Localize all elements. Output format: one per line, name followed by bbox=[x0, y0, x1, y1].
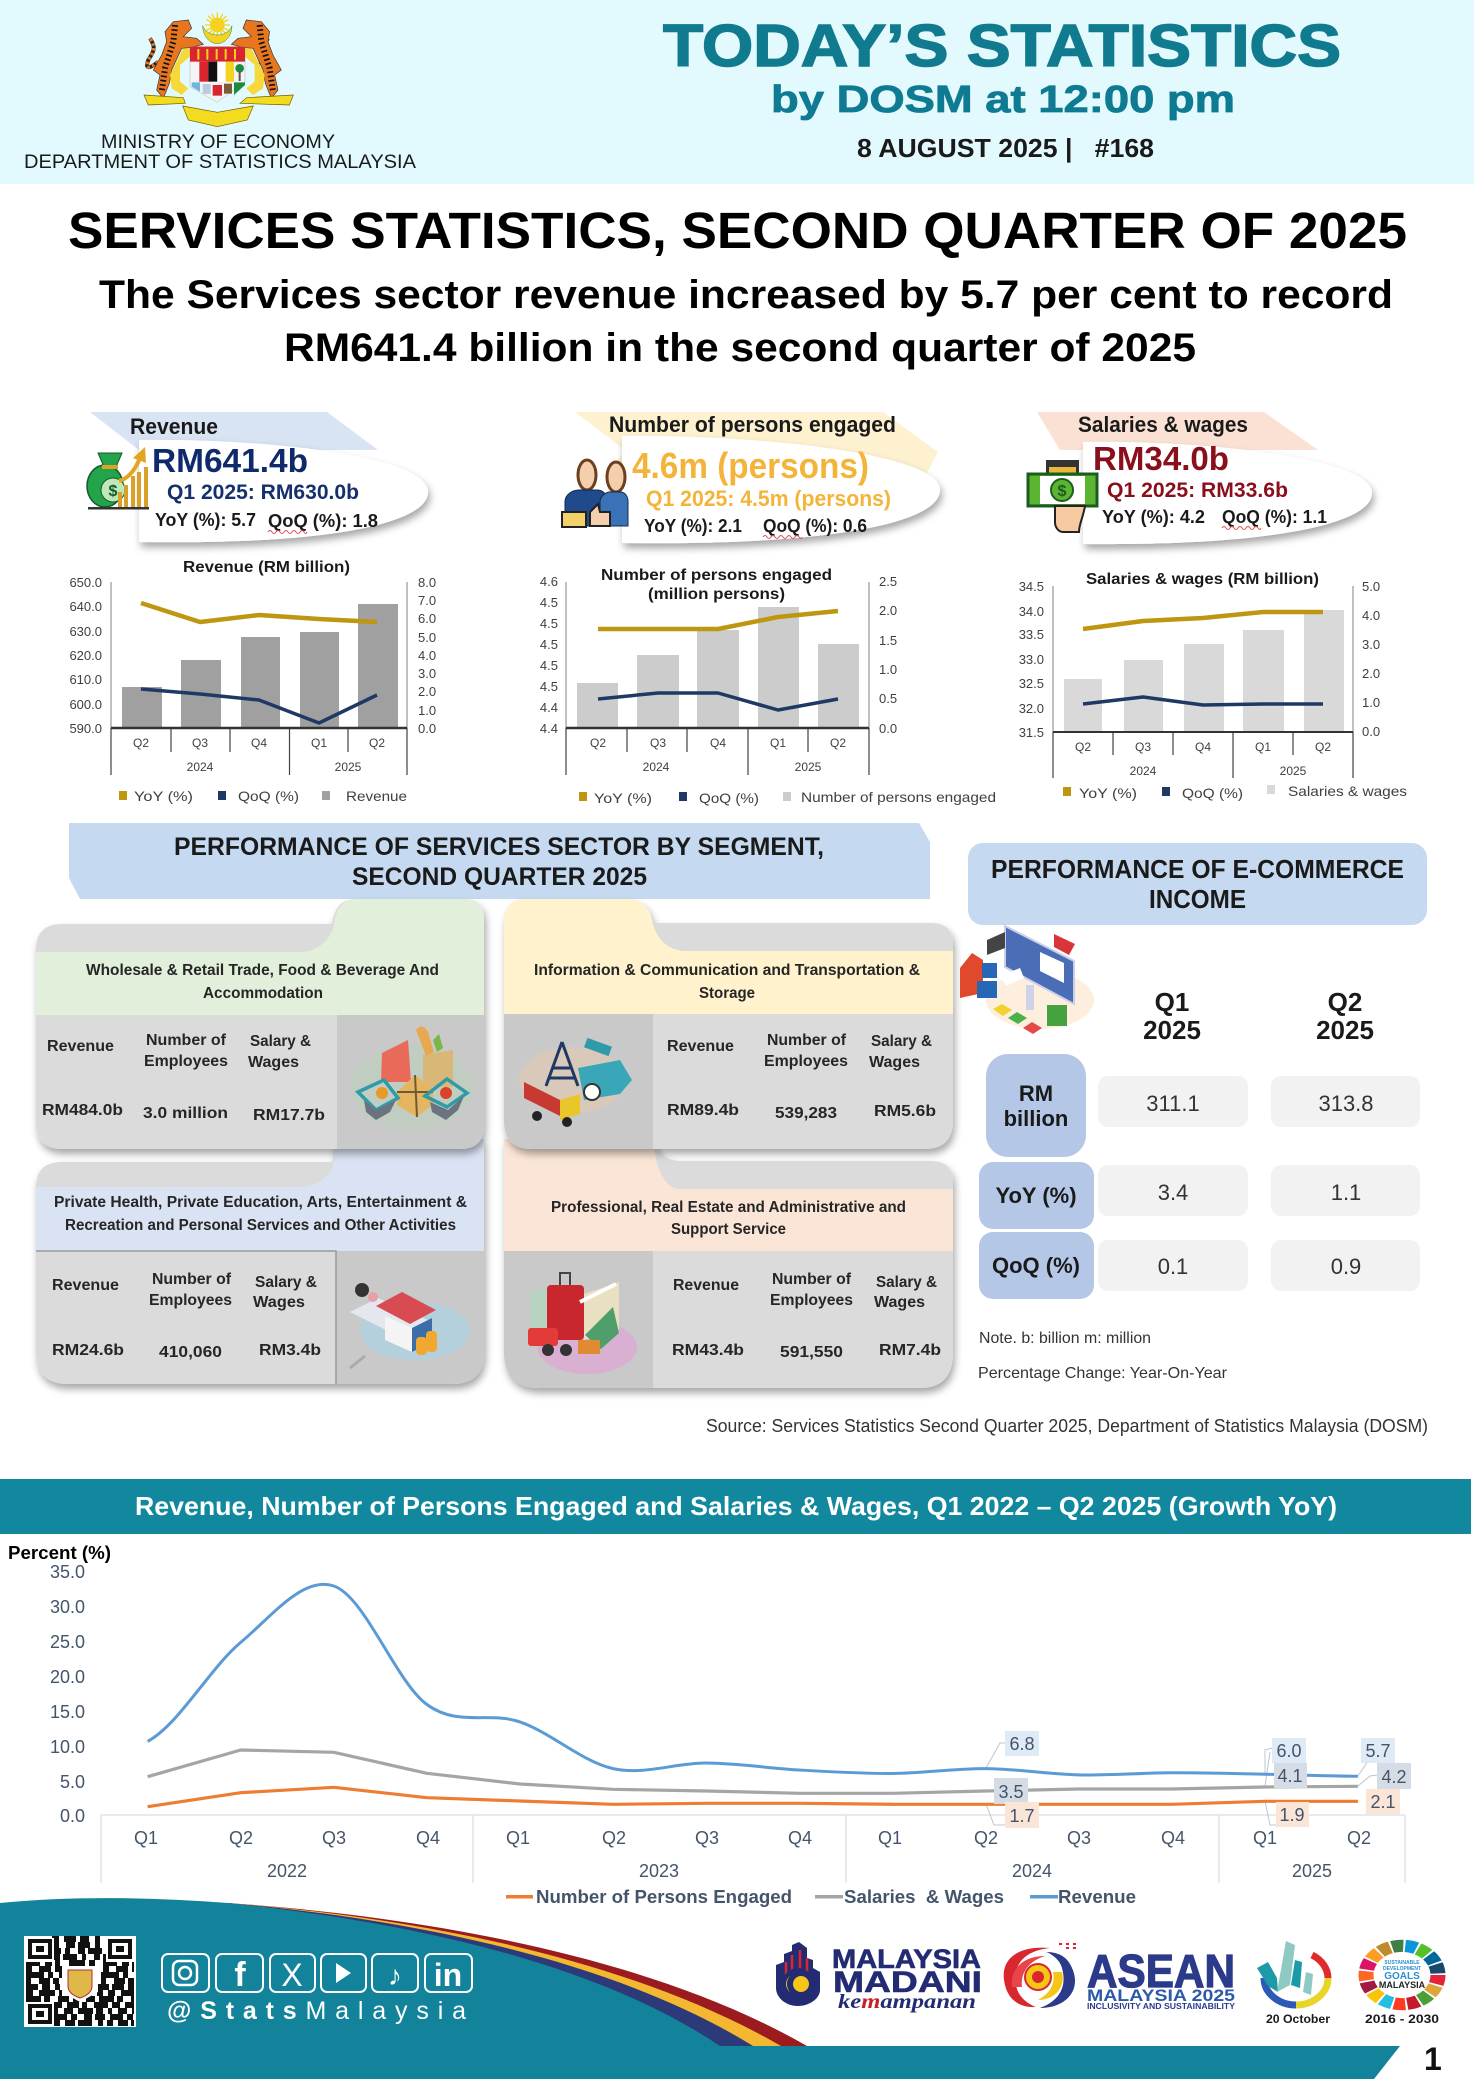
line chart: growth YoY: Q3 bbox=[1067, 1828, 1091, 1848]
panel: wholesale and retail segment: Wages bbox=[248, 1054, 299, 1071]
panel: information and transport segment: Number of bbox=[767, 1032, 847, 1049]
panel: revenue KPI bbox=[87, 412, 428, 542]
panel: revenue KPI: RM641.4b bbox=[152, 442, 308, 479]
line chart: growth YoY: Q1 bbox=[878, 1828, 902, 1848]
line chart: growth YoY: Q4 bbox=[1161, 1828, 1185, 1848]
panel: persons engaged KPI: YoY (%): 2.1 bbox=[644, 516, 742, 536]
chart: revenue: 7.0 bbox=[418, 593, 436, 608]
panel: salaries KPI: RM34.0b bbox=[1093, 440, 1229, 477]
column headings: 2025 bbox=[1143, 1015, 1201, 1045]
main title: The Services sector revenue increased by 5.7 per cent to record bbox=[99, 273, 1393, 317]
panel: revenue KPI: Q1 2025: RM630.0b bbox=[167, 481, 359, 504]
panel: information and transport segment: Revenue bbox=[667, 1038, 734, 1055]
icon: shopping baskets bbox=[350, 1026, 474, 1130]
chart: revenue: 600.0 bbox=[69, 697, 102, 712]
chart legend: Salaries & Wages bbox=[844, 1887, 1004, 1907]
chart: revenue: 3.0 bbox=[418, 666, 436, 681]
chart: persons engaged: 4.5 bbox=[540, 616, 558, 631]
panel: private health and education segment: Number of bbox=[152, 1271, 232, 1288]
chart: salaries and wages: 32.5 bbox=[1019, 676, 1044, 691]
chart: salaries and wages: 0.0 bbox=[1362, 724, 1380, 739]
row: YoY: 3.4 bbox=[1158, 1180, 1188, 1205]
line chart: growth YoY bbox=[8, 1543, 1411, 1907]
panel: wholesale and retail segment: Wholesale & Retail Trade, Food & Beverage And bbox=[86, 962, 439, 979]
panel: professional and real estate segment: RM7.4b bbox=[879, 1342, 941, 1359]
line chart: growth YoY: 25.0 bbox=[50, 1632, 85, 1652]
icon: banknote and hand: $ bbox=[1058, 483, 1067, 500]
chart: persons engaged: 2.5 bbox=[879, 574, 897, 589]
row: RM billion: 311.1 bbox=[1146, 1091, 1200, 1116]
chart: revenue: 2024 bbox=[187, 760, 214, 774]
chart: revenue: Q4 bbox=[251, 736, 267, 750]
logo: Sustainable Development Goals wheel bbox=[1365, 1946, 1439, 2026]
row: RM billion: billion bbox=[1004, 1106, 1068, 1131]
chart: salaries and wages: Salaries & wages (RM billion) bbox=[1086, 571, 1319, 588]
logo: Sustainable Development Goals wheel: MALAYSIA bbox=[1379, 1980, 1426, 1990]
chart: persons engaged: YoY (%) bbox=[594, 790, 652, 806]
panel: persons engaged KPI: Q1 2025: 4.5m (persons) bbox=[646, 486, 891, 511]
chart: persons engaged: Q2 bbox=[590, 736, 606, 750]
data labels: 6.0 bbox=[1276, 1741, 1302, 1761]
line chart: growth YoY: Q4 bbox=[788, 1828, 812, 1848]
chart: persons engaged: 2.0 bbox=[879, 603, 897, 618]
panel: private health and education segment: RM24.6b bbox=[52, 1342, 124, 1359]
panel: professional and real estate segment: 591,550 bbox=[780, 1344, 843, 1361]
chart: revenue: 620.0 bbox=[69, 648, 102, 663]
chart: revenue: QoQ (%) bbox=[238, 788, 299, 804]
heading: e-commerce bbox=[968, 843, 1427, 925]
line chart: growth YoY: Q3 bbox=[695, 1828, 719, 1848]
panel: salaries KPI: YoY (%): 4.2 bbox=[1102, 507, 1205, 527]
logo: ASEAN Malaysia 2025: ASEAN bbox=[1087, 1945, 1235, 1997]
panel: information and transport segment: RM5.6b bbox=[874, 1103, 936, 1120]
panel: persons engaged KPI: 4.6m (persons) bbox=[632, 445, 869, 486]
footer band bbox=[0, 1898, 1442, 2079]
data labels: 5.7 bbox=[1365, 1741, 1391, 1761]
row: QoQ: 0.9 bbox=[1331, 1254, 1361, 1279]
logo: Malaysia Madani bbox=[776, 1942, 982, 2013]
chart: salaries and wages: 33.5 bbox=[1019, 627, 1044, 642]
chart: revenue: 1.0 bbox=[418, 703, 436, 718]
chart: revenue: Revenue (RM billion) bbox=[183, 559, 350, 576]
main title: RM641.4 billion in the second quarter of 2025 bbox=[284, 326, 1196, 370]
line chart: growth YoY: 5.0 bbox=[60, 1772, 85, 1792]
panel: private health and education segment: RM3.4b bbox=[259, 1342, 321, 1359]
row: YoY: 1.1 bbox=[1331, 1180, 1361, 1205]
line chart: growth YoY: 2023 bbox=[639, 1861, 679, 1881]
logo: Malaysia Madani: MADANI bbox=[833, 1966, 982, 1999]
panel: information and transport segment bbox=[504, 899, 953, 1149]
chart: revenue: 2025 bbox=[335, 760, 362, 774]
logo: ASEAN Malaysia 2025: MALAYSIA 2025 bbox=[1087, 1986, 1235, 2005]
panel: salaries KPI bbox=[1028, 412, 1372, 544]
row: QoQ bbox=[979, 1232, 1420, 1299]
icon: buildings and coins bbox=[350, 1283, 470, 1368]
notes: Note. b: billion m: million bbox=[979, 1330, 1151, 1347]
social media icons: in bbox=[434, 1957, 462, 1993]
chart: salaries and wages: 32.0 bbox=[1019, 701, 1044, 716]
notes bbox=[978, 1330, 1228, 1382]
panel: professional and real estate segment: Support Service bbox=[671, 1221, 786, 1238]
panel: wholesale and retail segment bbox=[36, 899, 484, 1149]
chart: salaries and wages: QoQ (%) bbox=[1182, 785, 1243, 801]
line chart: growth YoY: 15.0 bbox=[50, 1702, 85, 1722]
header band bbox=[0, 0, 1474, 184]
logo: World Statistics Day: 20 October bbox=[1266, 2012, 1330, 2026]
logo: Malaysia Madani: kemampanan bbox=[838, 1991, 976, 2013]
panel: wholesale and retail segment: Employees bbox=[144, 1053, 228, 1070]
column headings: Q2 bbox=[1328, 987, 1362, 1017]
text: ministry: DEPARTMENT OF STATISTICS MALAYSIA bbox=[24, 152, 416, 173]
panel: information and transport segment: Salary & bbox=[871, 1033, 932, 1050]
chart: persons engaged: 4.4 bbox=[540, 700, 558, 715]
text: ministry: MINISTRY OF ECONOMY bbox=[101, 132, 335, 153]
chart: salaries and wages: 4.0 bbox=[1362, 608, 1380, 623]
line chart: growth YoY: Q2 bbox=[602, 1828, 626, 1848]
panel: persons engaged KPI: Number of persons engaged bbox=[609, 412, 896, 437]
panel: professional and real estate segment: Revenue bbox=[673, 1277, 739, 1294]
social media icons: X bbox=[281, 1957, 303, 1993]
panel: professional and real estate segment bbox=[504, 1139, 953, 1388]
line chart: growth YoY: 2025 bbox=[1292, 1861, 1332, 1881]
chart: salaries and wages: 2025 bbox=[1280, 764, 1307, 778]
chart: revenue: YoY (%) bbox=[134, 788, 193, 804]
line chart: growth YoY: Q1 bbox=[1253, 1828, 1277, 1848]
header title bbox=[663, 13, 1341, 163]
chart: revenue: 2.0 bbox=[418, 684, 436, 699]
icon: logistics and telecom bbox=[519, 1038, 632, 1127]
chart: persons engaged: 4.5 bbox=[540, 658, 558, 673]
main title bbox=[68, 202, 1407, 370]
chart: revenue bbox=[69, 559, 436, 804]
chart: salaries and wages: Q4 bbox=[1195, 740, 1211, 754]
panel: private health and education segment: Salary & bbox=[255, 1274, 317, 1291]
page number: 1 bbox=[1424, 2041, 1442, 2077]
line chart: growth YoY: 35.0 bbox=[50, 1562, 85, 1582]
chart: persons engaged: 2024 bbox=[643, 760, 670, 774]
panel: wholesale and retail segment: Accommodation bbox=[203, 985, 323, 1002]
row: RM billion: 313.8 bbox=[1318, 1091, 1374, 1116]
chart: persons engaged: Q4 bbox=[710, 736, 726, 750]
data labels: 1.7 bbox=[1009, 1806, 1035, 1826]
panel: information and transport segment: RM89.4b bbox=[667, 1102, 739, 1119]
panel: revenue KPI: Revenue bbox=[130, 414, 218, 439]
panel: salaries KPI: Salaries & wages bbox=[1078, 412, 1248, 437]
icon: banknote and hand bbox=[1028, 460, 1097, 532]
social media icons: ♪ bbox=[388, 1960, 402, 1991]
line chart: growth YoY: Q2 bbox=[974, 1828, 998, 1848]
chart: salaries and wages: 34.0 bbox=[1019, 604, 1044, 619]
icon: money bag bbox=[87, 447, 149, 510]
panel: wholesale and retail segment: Number of bbox=[146, 1032, 227, 1049]
chart: salaries and wages: 2.0 bbox=[1362, 666, 1380, 681]
text: ministry bbox=[24, 132, 416, 173]
chart: salaries and wages: 1.0 bbox=[1362, 695, 1380, 710]
chart: revenue: Q2 bbox=[133, 736, 149, 750]
chart: persons engaged: Q1 bbox=[770, 736, 786, 750]
panel: wholesale and retail segment: RM17.7b bbox=[253, 1107, 325, 1124]
data labels bbox=[994, 1731, 1411, 1828]
icon: suitcase and map bbox=[528, 1273, 637, 1374]
data labels: 6.8 bbox=[1009, 1734, 1035, 1754]
line chart: growth YoY: Q1 bbox=[134, 1828, 158, 1848]
data labels: 3.5 bbox=[998, 1782, 1024, 1802]
line chart: growth YoY: Q2 bbox=[229, 1828, 253, 1848]
chart: revenue: Q3 bbox=[192, 736, 208, 750]
social media icons: @Stats Malaysia bbox=[167, 1997, 466, 2025]
chart legend: Number of Persons Engaged bbox=[536, 1887, 792, 1907]
line chart: growth YoY: Q2 bbox=[1347, 1828, 1371, 1848]
chart legend: Revenue bbox=[1058, 1887, 1136, 1907]
panel: professional and real estate segment: Number of bbox=[772, 1271, 852, 1288]
logo: ASEAN Malaysia 2025: INCLUSIVITY AND SUSTAINABILITY bbox=[1087, 2002, 1236, 2011]
panel: private health and education segment: Revenue bbox=[52, 1277, 119, 1294]
main title: SERVICES STATISTICS, SECOND QUARTER OF 2025 bbox=[68, 202, 1407, 259]
line chart: growth YoY: 0.0 bbox=[60, 1806, 85, 1826]
chart: salaries and wages: Q2 bbox=[1075, 740, 1091, 754]
chart: salaries and wages: Q2 bbox=[1315, 740, 1331, 754]
chart: salaries and wages: 5.0 bbox=[1362, 579, 1380, 594]
icon: money bag: $ bbox=[109, 483, 118, 500]
chart: revenue: 640.0 bbox=[69, 599, 102, 614]
row: YoY: YoY (%) bbox=[995, 1183, 1077, 1208]
chart: persons engaged: 4.4 bbox=[540, 721, 558, 736]
panel: revenue KPI: YoY (%): 5.7 bbox=[155, 510, 256, 530]
QR code bbox=[24, 1936, 136, 2027]
data labels: 4.1 bbox=[1277, 1766, 1303, 1786]
chart: revenue: Q2 bbox=[369, 736, 385, 750]
chart: revenue: 590.0 bbox=[69, 721, 102, 736]
row: RM billion: RM bbox=[1019, 1081, 1053, 1106]
panel: revenue KPI: QoQ (%): 1.8 bbox=[268, 511, 378, 531]
line chart: growth YoY: 20.0 bbox=[50, 1667, 85, 1687]
data labels: 1.9 bbox=[1279, 1805, 1305, 1825]
panel: private health and education segment: Employees bbox=[149, 1292, 232, 1309]
panel: private health and education segment: Wages bbox=[253, 1294, 305, 1311]
panel: information and transport segment: 539,283 bbox=[775, 1105, 837, 1122]
panel: information and transport segment: Information & Communication and Transportation & bbox=[534, 962, 920, 979]
segment heading banner: PERFORMANCE OF SERVICES SECTOR BY SEGMENT, bbox=[174, 833, 824, 861]
line chart: growth YoY: Q4 bbox=[416, 1828, 440, 1848]
column headings: 2025 bbox=[1316, 1015, 1374, 1045]
chart: revenue: 8.0 bbox=[418, 575, 436, 590]
panel: persons engaged KPI: QoQ (%): 0.6 bbox=[763, 516, 867, 536]
chart: salaries and wages: 3.0 bbox=[1362, 637, 1380, 652]
line chart: growth YoY: 2022 bbox=[267, 1861, 307, 1881]
chart: salaries and wages: Q3 bbox=[1135, 740, 1151, 754]
chart: persons engaged: QoQ (%) bbox=[699, 790, 759, 806]
chart: persons engaged: Number of persons engaged bbox=[601, 567, 832, 584]
header title: 8 AUGUST 2025 | #168 bbox=[857, 133, 1154, 163]
chart: salaries and wages: Salaries & wages bbox=[1288, 783, 1407, 799]
panel: wholesale and retail segment: Revenue bbox=[47, 1038, 114, 1055]
chart: salaries and wages: 31.5 bbox=[1019, 725, 1044, 740]
panel: information and transport segment: Employees bbox=[764, 1053, 848, 1070]
row: YoY bbox=[979, 1162, 1420, 1229]
line chart: growth YoY: 2024 bbox=[1012, 1861, 1052, 1881]
segment heading banner bbox=[69, 823, 930, 899]
chart: persons engaged: Q2 bbox=[830, 736, 846, 750]
chart: persons engaged: 1.5 bbox=[879, 633, 897, 648]
chart: persons engaged: (million persons) bbox=[648, 586, 785, 603]
line chart: growth YoY: 30.0 bbox=[50, 1597, 85, 1617]
panel: information and transport segment: Storage bbox=[699, 985, 755, 1002]
panel: persons engaged KPI bbox=[562, 412, 940, 543]
notes: Percentage Change: Year-On-Year bbox=[978, 1365, 1228, 1382]
chart: revenue: 610.0 bbox=[69, 672, 102, 687]
chart: revenue: 4.0 bbox=[418, 648, 436, 663]
panel: private health and education segment: 410,060 bbox=[159, 1344, 222, 1361]
chart legend bbox=[506, 1887, 1136, 1907]
panel: professional and real estate segment: Professional, Real Estate and Administrative and bbox=[551, 1199, 906, 1216]
chart: persons engaged: 1.0 bbox=[879, 662, 897, 677]
heading: e-commerce: INCOME bbox=[1149, 884, 1246, 914]
chart heading band bbox=[0, 1479, 1471, 1534]
panel: wholesale and retail segment: Salary & bbox=[250, 1033, 311, 1050]
row: QoQ: 0.1 bbox=[1158, 1254, 1188, 1279]
row: QoQ: QoQ (%) bbox=[992, 1253, 1080, 1278]
column headings bbox=[1143, 987, 1374, 1045]
chart: revenue: 0.0 bbox=[418, 721, 436, 736]
chart: salaries and wages: 34.5 bbox=[1019, 579, 1044, 594]
chart: revenue: Q1 bbox=[311, 736, 327, 750]
header title: by DOSM at 12:00 pm bbox=[771, 79, 1235, 121]
logo: Sustainable Development Goals wheel: DEVELOPMENT bbox=[1383, 1966, 1421, 1972]
line chart: growth YoY: Q1 bbox=[506, 1828, 530, 1848]
chart: persons engaged: 4.5 bbox=[540, 637, 558, 652]
social media icons bbox=[162, 1954, 472, 2025]
panel: private health and education segment bbox=[36, 1139, 484, 1384]
data labels: 4.2 bbox=[1381, 1767, 1407, 1787]
chart: persons engaged: 0.5 bbox=[879, 691, 897, 706]
chart: revenue: 6.0 bbox=[418, 611, 436, 626]
chart: salaries and wages: 2024 bbox=[1130, 764, 1157, 778]
logo: Malaysia Madani: MALAYSIA bbox=[832, 1944, 981, 1974]
panel: salaries KPI: QoQ (%): 1.1 bbox=[1222, 507, 1327, 527]
chart: salaries and wages: YoY (%) bbox=[1079, 785, 1137, 801]
social media icons: f bbox=[234, 1956, 246, 1994]
chart: persons engaged: 2025 bbox=[795, 760, 822, 774]
line chart: growth YoY: Percent (%) bbox=[8, 1543, 111, 1563]
logo: Sustainable Development Goals wheel: 2016 - 2030 bbox=[1365, 2012, 1439, 2026]
panel: wholesale and retail segment: 3.0 million bbox=[143, 1105, 228, 1122]
row: RM billion bbox=[986, 1054, 1420, 1157]
logo: Sustainable Development Goals wheel: SUSTAINABLE bbox=[1384, 1960, 1420, 1966]
chart: revenue: Revenue bbox=[346, 788, 407, 804]
heading: e-commerce: PERFORMANCE OF E-COMMERCE bbox=[991, 854, 1404, 884]
line chart: growth YoY: Q3 bbox=[322, 1828, 346, 1848]
chart: revenue: 5.0 bbox=[418, 630, 436, 645]
icon: Malaysia coat of arms bbox=[144, 12, 293, 127]
chart: persons engaged: 4.6 bbox=[540, 574, 558, 589]
source line: Source: Services Statistics Second Quarter 2025, Department of Statistics Malaysia (DOSM) bbox=[706, 1416, 1428, 1436]
data labels: 2.1 bbox=[1370, 1792, 1396, 1812]
chart heading band: Revenue, Number of Persons Engaged and Salaries & Wages, Q1 2022 – Q2 2025 (Growth YoY) bbox=[135, 1491, 1337, 1521]
icon: two people bbox=[562, 460, 628, 527]
chart: salaries and wages bbox=[1019, 571, 1407, 801]
chart: persons engaged: Number of persons engaged bbox=[801, 789, 996, 805]
logo: Sustainable Development Goals wheel: GOALS bbox=[1384, 1971, 1420, 1982]
panel: e-commerce income bbox=[960, 843, 1427, 1382]
chart: salaries and wages: Q1 bbox=[1255, 740, 1271, 754]
panel: private health and education segment: Private Health, Private Education, Arts, Entertainment & bbox=[54, 1194, 467, 1211]
chart: persons engaged: Q3 bbox=[650, 736, 666, 750]
panel: salaries KPI: Q1 2025: RM33.6b bbox=[1107, 479, 1288, 502]
line chart: growth YoY: 10.0 bbox=[50, 1737, 85, 1757]
chart: persons engaged: 4.5 bbox=[540, 595, 558, 610]
logo: World Statistics Day bbox=[1257, 1941, 1330, 2026]
header title: TODAY’S STATISTICS bbox=[663, 13, 1341, 79]
panel: professional and real estate segment: Salary & bbox=[876, 1274, 937, 1291]
chart: persons engaged: 4.5 bbox=[540, 679, 558, 694]
panel: information and transport segment: Wages bbox=[869, 1054, 920, 1071]
panel: wholesale and retail segment: RM484.0b bbox=[42, 1102, 123, 1119]
panel: professional and real estate segment: RM43.4b bbox=[672, 1342, 744, 1359]
panel: professional and real estate segment: Employees bbox=[770, 1292, 853, 1309]
chart: salaries and wages: 33.0 bbox=[1019, 652, 1044, 667]
panel: private health and education segment: Recreation and Personal Services and Other Activities bbox=[65, 1217, 456, 1234]
column headings: Q1 bbox=[1155, 987, 1189, 1017]
logo: ASEAN Malaysia 2025 bbox=[1004, 1944, 1236, 2011]
chart: revenue: 650.0 bbox=[69, 575, 102, 590]
chart: persons engaged: 0.0 bbox=[879, 721, 897, 736]
chart: revenue: 630.0 bbox=[69, 624, 102, 639]
segment heading banner: SECOND QUARTER 2025 bbox=[352, 863, 647, 891]
panel: professional and real estate segment: Wages bbox=[874, 1294, 925, 1311]
icon: online shop monitor bbox=[960, 926, 1094, 1034]
chart: persons engaged bbox=[540, 567, 996, 806]
